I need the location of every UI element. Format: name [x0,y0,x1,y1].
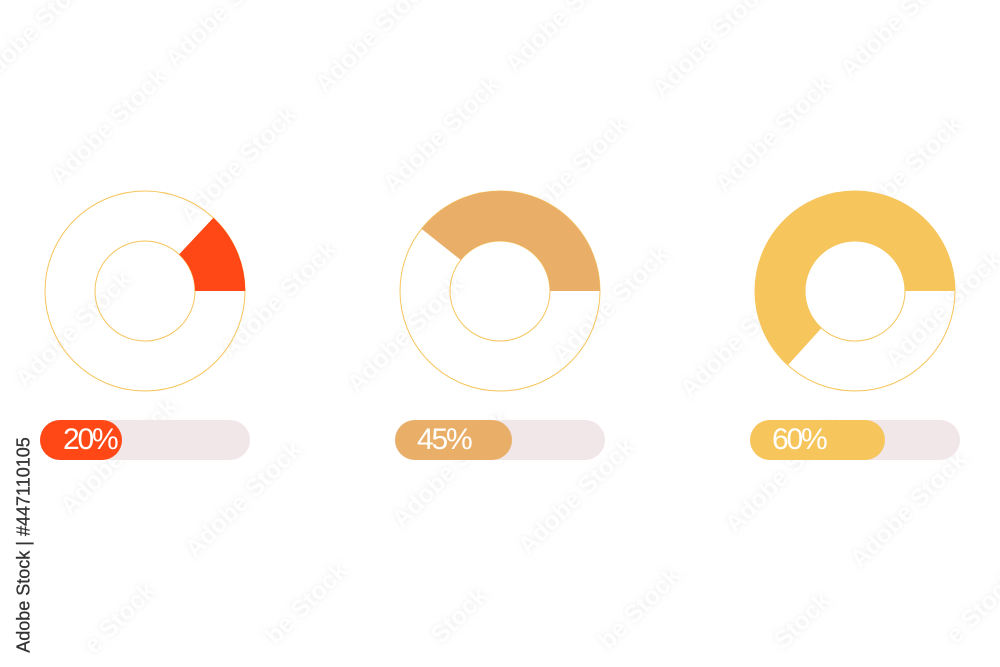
watermark pattern: Stock [425,581,493,649]
watermark pattern: Adobe Stock [546,240,674,368]
watermark pattern: Adobe Stock [839,110,967,238]
watermark pattern: be Stock [260,556,353,650]
progress bar: 20% [40,420,250,460]
watermark pattern: Adobe Stock [341,270,469,398]
bar fill: 60% [750,420,885,460]
watermark pattern: Adobe Stock [386,405,514,533]
watermark pattern: be Stock [593,561,686,655]
watermark pattern: Adobe Stock [214,235,342,363]
watermark pattern: Adobe Stock [506,110,634,238]
label: 45%: 45% [417,423,470,456]
watermark pattern: Adobe Stock [377,70,505,198]
watermark pattern: Adobe Stock [44,62,172,190]
watermark pattern: Adobe Stock [844,445,972,573]
progress bar: 45% [395,420,605,460]
watermark pattern: e Stock [79,576,161,659]
watermark pattern: Adobe Stock [54,392,182,520]
watermark pattern: Stock [768,586,836,654]
bar fill: 20% [40,420,122,460]
watermark pattern: Adobe Stock [674,275,802,403]
bar fill: 45% [395,420,512,460]
label: 20%: 20% [63,423,116,456]
watermark pattern: Adobe Stock [709,70,837,198]
donut chart: 60% [755,191,955,391]
watermark pattern: Adobe Stock [174,100,302,228]
watermark pattern: Adobe Stock [9,265,137,393]
watermark pattern: Adobe Stock [512,432,640,560]
donut chart: 45% [400,191,600,391]
donut chart: 20% [45,191,245,391]
progress bar: 60% [750,420,960,460]
label: 60%: 60% [772,423,825,456]
stock id side text: Adobe Stock | #447110105 [13,437,33,652]
watermark pattern: Adobe Stock [179,435,307,563]
watermark pattern: Adobe Stock [719,410,847,538]
